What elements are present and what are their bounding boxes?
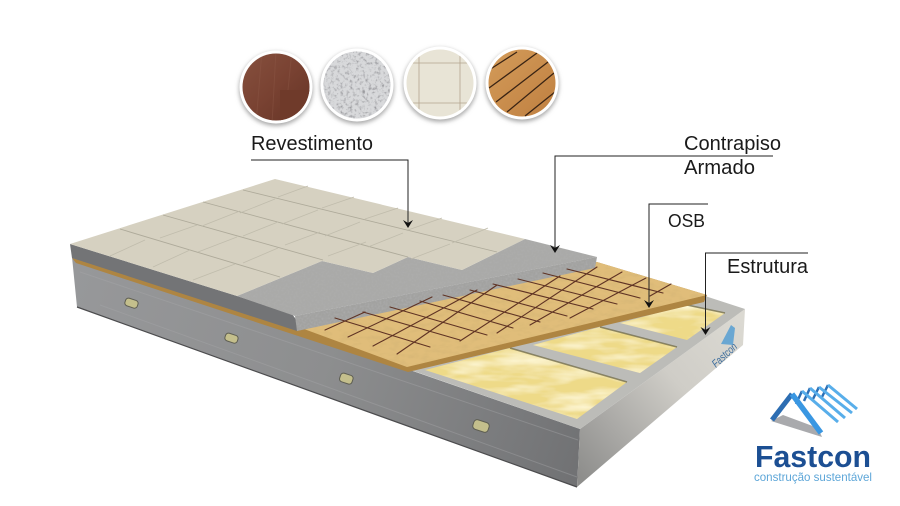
callout: OSB [644,204,708,308]
concrete subfloor [70,239,597,331]
callout: Contrapiso Armado: Contrapiso [684,133,781,155]
structure front face [72,257,580,487]
callout: Revestimento [251,133,413,228]
wordmark: Fastcon [755,439,871,474]
floor slab cutaway [70,179,745,487]
callout: OSB: OSB [668,210,705,231]
swatch: cream stone tile [403,46,477,122]
infographic: floor layers diagram [70,46,872,488]
callout: Revestimento: Revestimento [251,133,373,155]
callout: Estrutura [700,253,809,335]
inspection openings [124,297,490,433]
swatch: granite [320,48,394,124]
oriented strand board [72,258,707,372]
icon: small fastcon mark [721,325,735,345]
structure end face with logo [577,309,745,487]
structure top frame [405,296,745,429]
tagline: construção sustentável [754,470,872,484]
logo: Fastcon [754,385,872,484]
small fastcon text: Fastcon [710,341,740,370]
callout: Estrutura: Estrutura [727,256,809,278]
icon: roof trusses [771,385,857,437]
swatch: teak deck [485,46,559,122]
swatch: dark wood flooring [239,50,313,126]
callout: Contrapiso Armado [550,133,781,253]
reinforcing steel mesh [325,267,671,354]
glass wool insulation cavities [425,305,725,419]
callout: Contrapiso Armado: Armado [684,157,755,179]
ceramic tile surface [70,179,525,296]
